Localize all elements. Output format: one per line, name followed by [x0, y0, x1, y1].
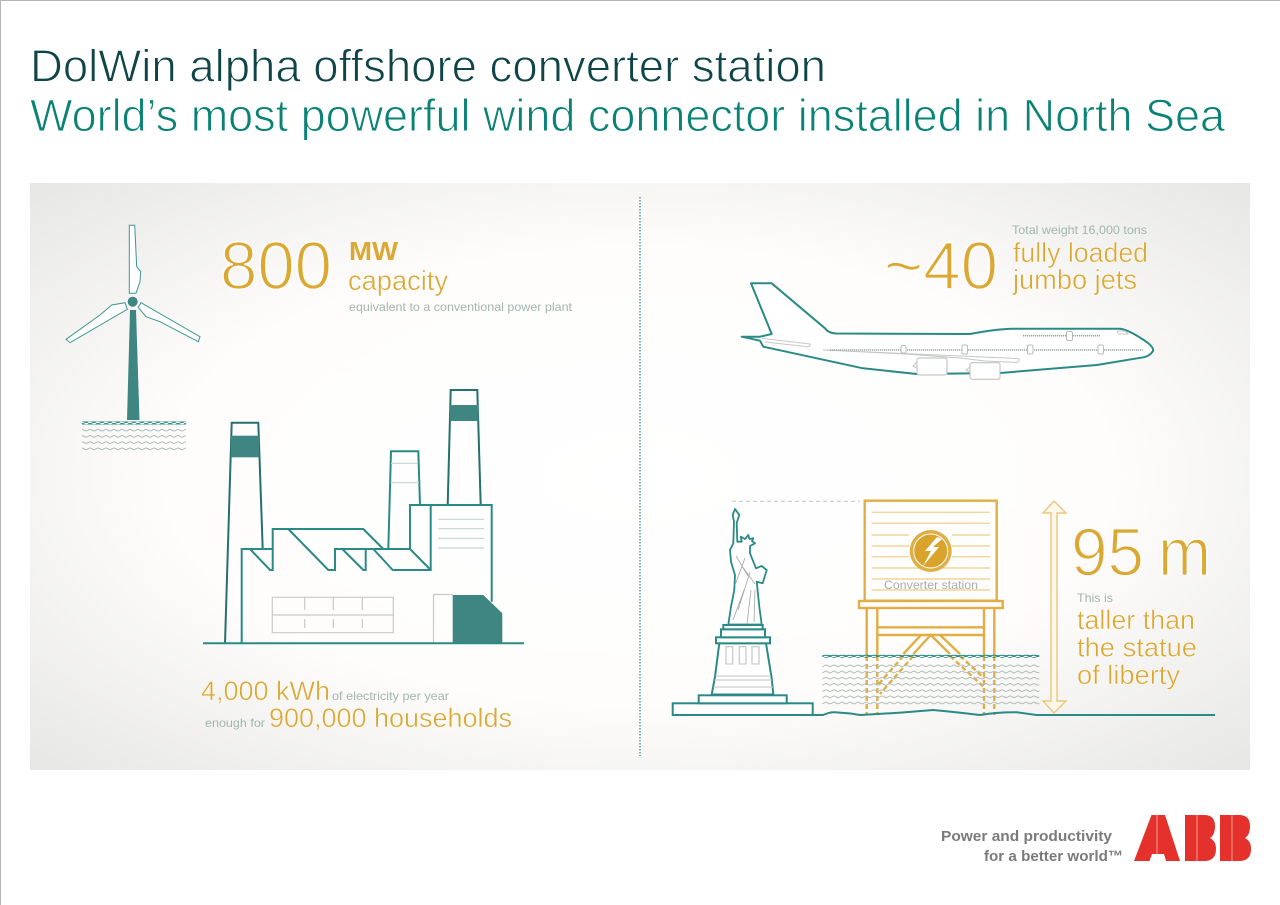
- arrow: height: [1043, 501, 1066, 713]
- height reference line: [732, 500, 860, 502]
- icon: jumbo jet: [742, 283, 1153, 379]
- tagline: for a better world™: [984, 848, 1123, 865]
- capacity stat: MW: [349, 236, 398, 266]
- title: DolWin alpha offshore converter station: [30, 40, 826, 92]
- title: World’s most powerful wind connector installed in North Sea: [30, 90, 1226, 141]
- capacity stat: 800: [220, 228, 332, 304]
- electricity stat: 4,000 kWh: [201, 676, 330, 706]
- height stat: of liberty: [1077, 660, 1180, 690]
- height stat: 95: [1071, 514, 1144, 590]
- height stat: m: [1158, 514, 1211, 590]
- weight stat: fully loaded: [1013, 237, 1148, 268]
- weight stat: [884, 223, 1148, 304]
- seabed line: [812, 710, 1215, 715]
- icon: power plant: [203, 390, 524, 643]
- tagline: Power and productivity: [941, 828, 1113, 845]
- icon: converter station: [822, 501, 1039, 715]
- tagline: [941, 828, 1123, 865]
- capacity stat: capacity: [348, 265, 448, 296]
- icon: wind turbine: [66, 225, 200, 450]
- electricity stat: of electricity per year: [332, 689, 449, 703]
- electricity stat: [201, 676, 512, 733]
- capacity stat: equivalent to a conventional power plant: [349, 300, 573, 314]
- icon: lightning badge: [910, 530, 952, 572]
- electricity stat: 900,000 households: [269, 703, 512, 733]
- height stat: taller than: [1077, 605, 1195, 635]
- icon: ABB logo: [1134, 815, 1251, 861]
- weight stat: Total weight 16,000 tons: [1012, 223, 1147, 237]
- height stat: [1071, 514, 1211, 690]
- weight stat: jumbo jets: [1012, 264, 1137, 295]
- capacity stat: [220, 228, 573, 314]
- title: [30, 40, 1226, 141]
- height stat: the statue: [1077, 633, 1197, 663]
- weight stat: ~40: [884, 228, 998, 304]
- icon: converter station: Converter station: [884, 578, 978, 592]
- icon: statue of liberty: [673, 509, 813, 715]
- panel: infographic background: [30, 183, 1250, 770]
- electricity stat: enough for: [205, 716, 265, 730]
- height stat: This is: [1077, 591, 1113, 605]
